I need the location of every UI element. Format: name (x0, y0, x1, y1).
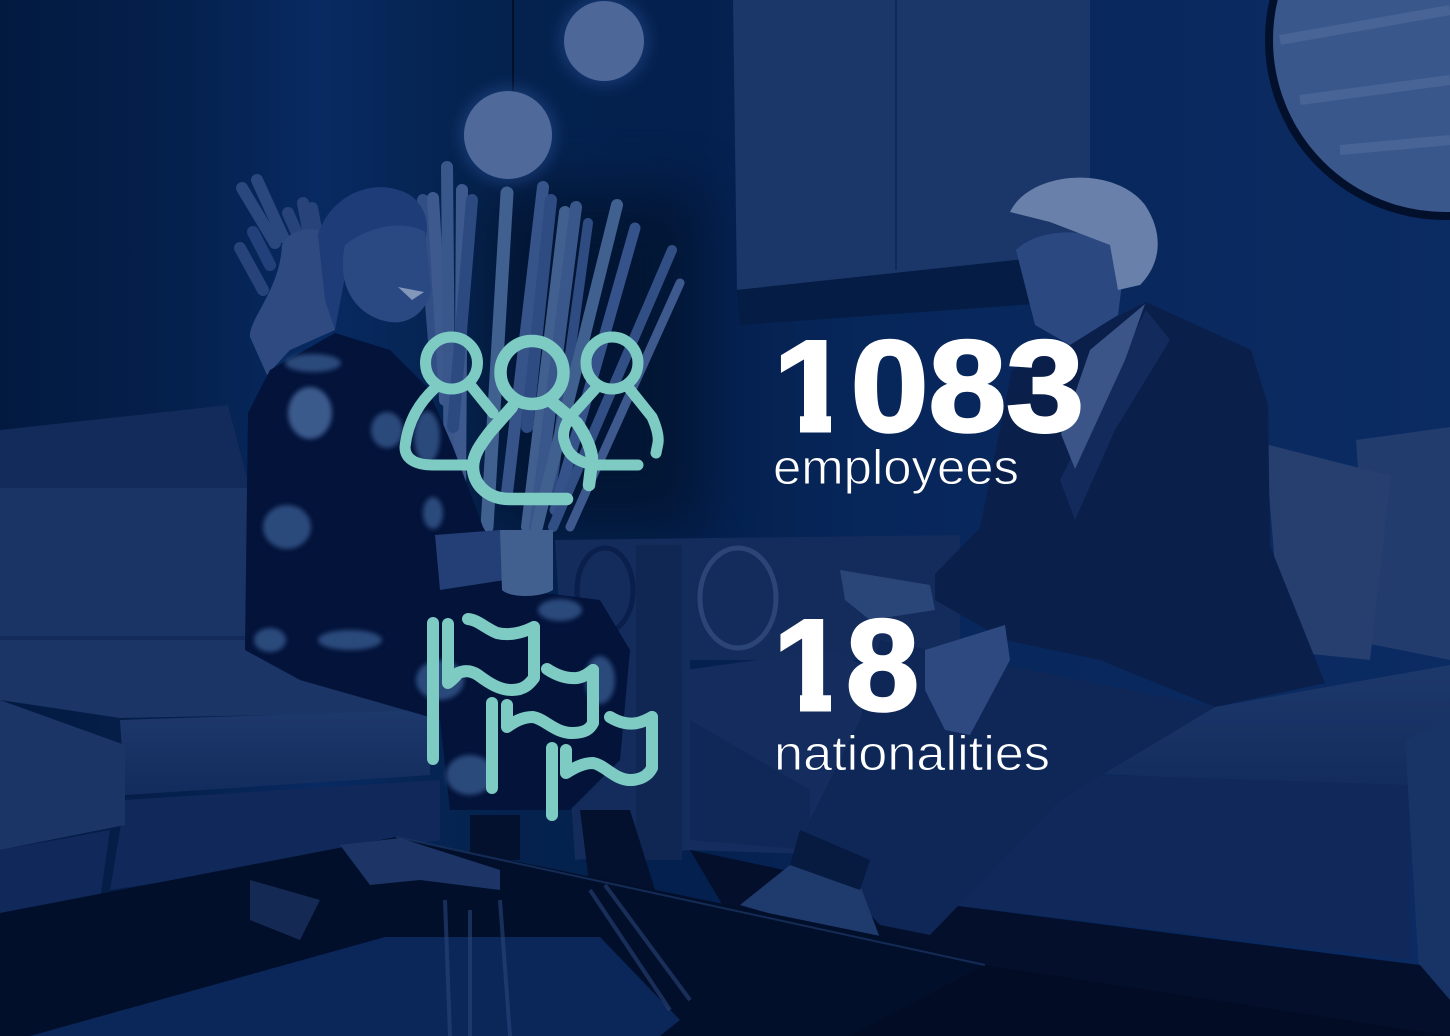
stat: employees (776, 338, 1081, 494)
icon: three flags (433, 619, 652, 815)
shirt (1061, 304, 1145, 469)
glass table (0, 837, 1450, 1036)
hands (925, 625, 1010, 735)
icon: people group (405, 337, 658, 499)
right sofa (555, 427, 1450, 1000)
dress (245, 333, 630, 810)
man sitting (740, 178, 1325, 938)
hair (318, 187, 427, 330)
face (343, 226, 431, 322)
label employees: employees (773, 441, 1019, 495)
floral print (254, 354, 615, 795)
hair (1010, 178, 1158, 290)
hand and mug (435, 530, 505, 590)
shoe (740, 865, 880, 938)
person left (405, 337, 493, 465)
number 1083: 1083 (773, 313, 1084, 459)
woman sitting (245, 187, 655, 890)
person centre (473, 341, 592, 499)
jacket (935, 302, 1325, 707)
person right (563, 337, 658, 465)
number 18: 18 (773, 592, 919, 738)
boots (580, 810, 655, 890)
decorative sticks (240, 167, 680, 527)
flag three (552, 717, 652, 815)
floor (690, 850, 1450, 1036)
pendant lamps (458, 0, 650, 185)
face (1016, 232, 1125, 345)
round mirror (1269, 0, 1450, 216)
flag two (492, 669, 593, 788)
wall acoustic panels (733, 0, 1090, 325)
label nationalities: nationalities (774, 727, 1050, 781)
left sofa (0, 405, 440, 920)
stat: nationalities (778, 618, 1048, 770)
flag one (433, 619, 534, 759)
legs (800, 640, 1215, 935)
ponytail (250, 229, 335, 375)
